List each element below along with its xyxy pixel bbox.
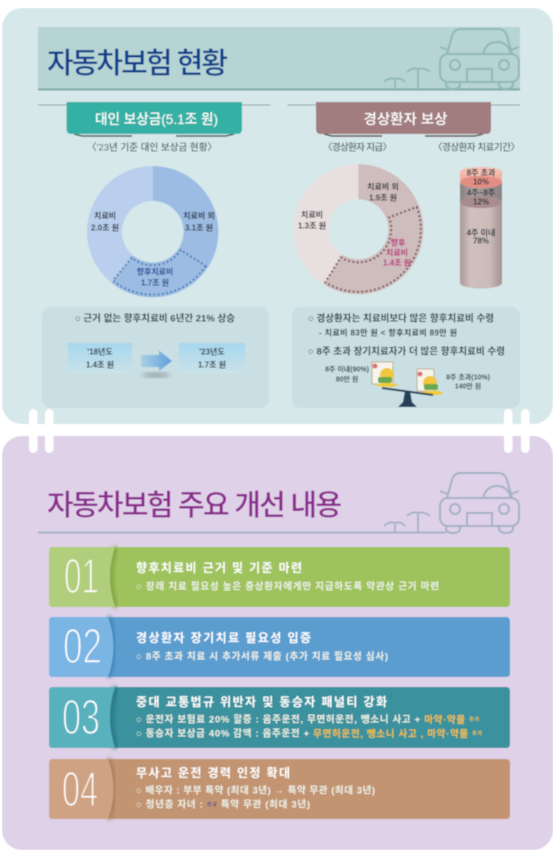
ribbon: minor injury compensation [288, 102, 520, 136]
card 03: ○ 동승자 보상금 40% 감액 : 음주운전 + 무면허운전, 뺑소니 사고 , 마약·약물 추가 [136, 728, 482, 740]
card 02: ○ 8주 초과 치료 시 추가서류 제출 (추가 치료 필요성 심사) [136, 650, 388, 662]
box: 2023: 1.7조 원 [198, 360, 226, 370]
donut chart: minor injury payments: 치료비 외 [367, 182, 399, 192]
cylinder chart: treatment period: 4주 이내 [467, 228, 495, 238]
donut chart: minor injury payments: 1.9조 원 [369, 192, 397, 202]
icon: car [440, 29, 519, 89]
donut chart: minor injury payments: 향후 [391, 238, 406, 248]
card 04: 무사고 운전 경력 인정 확대 [136, 765, 290, 780]
cylinder chart: treatment period: 12% [473, 198, 489, 206]
donut chart: bodily compensation: 1.7조 원 [141, 278, 169, 288]
heading: bodily compensation status: 〈'23년 기준 대인 보상금 현황〉 [87, 142, 217, 154]
card 01 [49, 547, 510, 607]
heading: minor injury treatment period: 〈경상환자 치료기간〉 [433, 142, 520, 154]
card 01: 향후치료비 근거 및 기준 마련 [136, 560, 302, 575]
panel: minor injury findings [292, 307, 520, 408]
card 04: ○ 청년층 자녀 : 신규 특약 무관 (최대 3년) [136, 798, 310, 810]
box: 2018: 1.4조 원 [86, 360, 114, 370]
panel: minor injury findings: 80만 원 [336, 374, 358, 384]
card 02 [49, 617, 510, 677]
donut chart: bodily compensation: 치료비 [94, 210, 116, 220]
card 02: 02 [63, 620, 102, 674]
card 03: ○ 운전자 보험료 20% 할증 : 음주운전, 무면허운전, 뺑소니 사고 + 마약·약물 추가 [136, 714, 479, 726]
card 01: 01 [64, 550, 99, 604]
card 04 [49, 759, 510, 819]
cylinder chart: treatment period [460, 167, 502, 288]
box: 2023: '23년도 [199, 346, 225, 356]
card 01: ○ 장래 치료 필요성 높은 중상환자에게만 지급하도록 약관상 근거 마련 [136, 580, 439, 592]
donut chart: bodily compensation: 치료비 외 [183, 210, 215, 220]
donut chart: minor injury payments [293, 164, 423, 294]
binder tabs: right [504, 409, 530, 453]
title: 자동차보험 주요 개선 내용 [47, 489, 342, 522]
box: 2018 [68, 343, 132, 373]
donut chart: bodily compensation: 향후치료비 [137, 266, 173, 276]
header band [38, 27, 520, 90]
icon: car [440, 473, 519, 533]
card 02: 경상환자 장기치료 필요성 입증 [136, 630, 311, 645]
panel: minor injury findings: ○ 경상환자는 치료비보다 많은 향후치료비 수령 [308, 312, 494, 324]
donut chart: bodily compensation [87, 166, 218, 297]
heading: minor injury payments: 〈경상환자 지급〉 [323, 142, 392, 154]
panel: treatment cost increase: ○ 근거 없는 향후치료비 6년간 21% 상승 [75, 312, 235, 324]
donut chart: bodily compensation: 2.0조 원 [91, 222, 119, 232]
card 03 [49, 687, 510, 748]
icon: balance scale [372, 362, 443, 407]
cylinder chart: treatment period: 78% [473, 236, 489, 246]
panel: minor injury findings: 8주 초과(10%) [446, 372, 490, 382]
icon: palm trees [384, 68, 430, 89]
panel: treatment cost increase [42, 307, 269, 408]
card 03: 03 [62, 691, 100, 745]
icon: palm trees [384, 512, 430, 533]
title: 자동차보험 현황 [47, 47, 228, 80]
card 04: 04 [62, 763, 98, 817]
panel: current status [2, 8, 553, 424]
arrow: increase [141, 350, 172, 377]
donut chart: bodily compensation: 3.1조 원 [185, 222, 213, 232]
ribbon: minor injury compensation: 경상환자 보상 [364, 111, 448, 127]
ribbon: bodily compensation [38, 102, 270, 136]
cylinder chart: treatment period: 4주~8주 [467, 188, 496, 198]
cylinder chart: treatment period: 8주 초과 [467, 168, 496, 178]
ribbon: bodily compensation: 대인 보상금(5.1조 원) [95, 111, 218, 127]
donut chart: minor injury payments: 1.4조 원 [383, 258, 411, 268]
panel: minor injury findings: 140만 원 [455, 382, 481, 390]
cylinder chart: treatment period: 10% [473, 178, 489, 186]
donut chart: minor injury payments: 1.3조 원 [298, 220, 326, 230]
panel: minor injury findings: 8주 이내(90%) [325, 364, 369, 374]
card 04: ○ 배우자 : 부부 특약 (최대 3년) → 특약 무관 (최대 3년) [136, 784, 375, 796]
box: 2023 [179, 343, 245, 373]
donut chart: minor injury payments: 치료비 [386, 248, 408, 258]
panel: main improvements [2, 436, 553, 850]
panel: minor injury findings: - 치료비 83만 원 < 향후치료비 89만 원 [319, 328, 457, 338]
donut chart: minor injury payments: 치료비 [301, 210, 323, 220]
binder tabs: left [29, 409, 54, 453]
panel: minor injury findings: ○ 8주 초과 장기치료자가 더 많은 향후치료비 수령 [308, 346, 505, 358]
box: 2018: '18년도 [87, 346, 113, 356]
card 03: 중대 교통법규 위반자 및 동승자 패널티 강화 [136, 694, 387, 709]
